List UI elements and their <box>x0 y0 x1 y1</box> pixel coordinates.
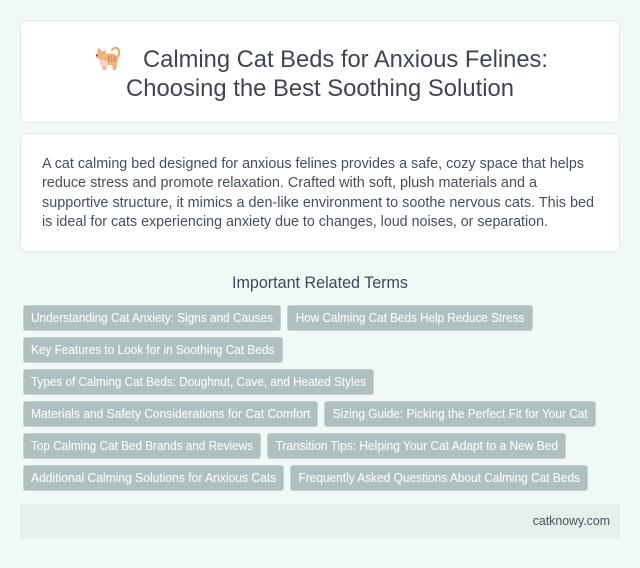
text block: description: reduce stress and promote relaxation. Crafted with soft, plush materials and a <box>42 175 538 191</box>
tag: materials and safety <box>24 402 318 426</box>
tag: top brands: Top Calming Cat Bed Brands and Reviews <box>31 439 253 453</box>
tag: top brands <box>24 434 260 458</box>
tag: faq: Frequently Asked Questions About Calming Cat Beds <box>298 471 580 485</box>
tag: key features <box>24 338 282 362</box>
heading: important related terms: Important Related Terms <box>232 274 408 292</box>
tag: understanding cat anxiety <box>24 306 280 330</box>
text block: description <box>42 156 594 230</box>
footer <box>20 504 620 538</box>
tag: key features: Key Features to Look for in Soothing Cat Beds <box>31 343 274 357</box>
tag: how beds reduce stress: How Calming Cat Beds Help Reduce Stress <box>296 311 524 325</box>
tag: understanding cat anxiety: Understanding Cat Anxiety: Signs and Causes <box>31 311 273 325</box>
tag: additional solutions <box>24 466 284 490</box>
title: Calming Cat Beds for Anxious Felines: <box>143 46 548 73</box>
tag: faq <box>290 466 588 490</box>
tag: types of beds <box>24 370 374 394</box>
tag list <box>24 306 596 490</box>
tag: types of beds: Types of Calming Cat Beds: Doughnut, Cave, and Heated Styles <box>31 375 366 389</box>
title <box>126 46 548 102</box>
title: Choosing the Best Soothing Solution <box>126 75 514 102</box>
icon: cat <box>96 48 119 70</box>
text block: description: is ideal for cats experiencing anxiety due to changes, loud noises, or separation. <box>42 214 548 230</box>
footer: site name: catknowy.com <box>533 514 610 528</box>
text block: description: A cat calming bed designed for anxious felines provides a safe, cozy space that helps <box>42 156 584 172</box>
tag: how beds reduce stress <box>288 306 532 330</box>
tag: materials and safety: Materials and Safety Considerations for Cat Comfort <box>31 407 311 421</box>
panel: description card <box>20 134 620 252</box>
tag: additional solutions: Additional Calming Solutions for Anxious Cats <box>31 471 276 485</box>
tag: sizing guide: Sizing Guide: Picking the Perfect Fit for Your Cat <box>333 407 588 421</box>
tag: sizing guide <box>324 402 596 426</box>
tag: transition tips <box>268 434 566 458</box>
text block: description: supportive structure, it mimics a den-like environment to soothe nervous cats. This bed <box>42 195 594 211</box>
panel: title card <box>20 20 620 122</box>
tag: transition tips: Transition Tips: Helping Your Cat Adapt to a New Bed <box>276 439 558 453</box>
